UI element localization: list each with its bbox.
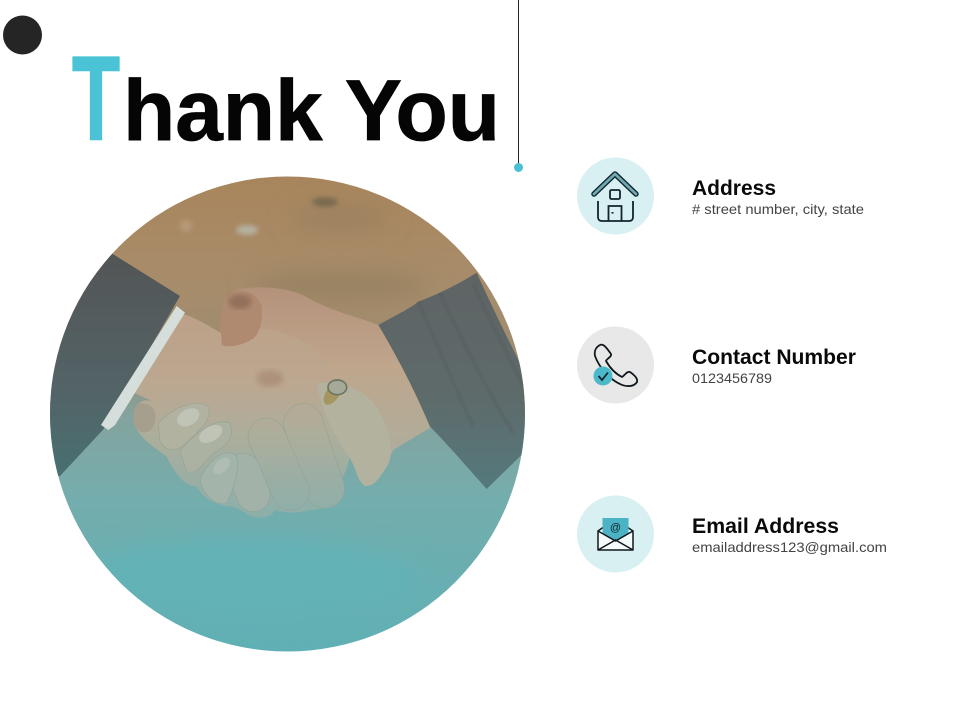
right sleeve: [378, 273, 530, 489]
ring: [324, 379, 348, 405]
text: Address: Address: [692, 177, 776, 200]
left hand fingertips with nails: [133, 403, 238, 504]
title: Thank You: T: [72, 32, 120, 166]
text: Contact Number: [692, 346, 856, 386]
handshake photo circle: [30, 170, 540, 660]
icon: house: [577, 158, 654, 234]
text: Address: [692, 177, 864, 217]
knuckle shading: [257, 370, 283, 387]
text: Email Address: [692, 515, 887, 555]
vertical accent line with dot: [514, 0, 523, 172]
shaded thumb: [221, 290, 262, 346]
text: Address: # street number, city, state: [692, 201, 864, 217]
rear finger with ring: [317, 383, 391, 486]
white shirt cuff: [101, 306, 185, 430]
sleeve folds: [417, 301, 524, 386]
decorative black dot: [3, 16, 42, 54]
text: Email Address: Email Address: [692, 515, 839, 538]
title: Thank You: hank You: [123, 63, 500, 159]
icon: email envelope: [577, 496, 654, 572]
front hand and palm: [133, 314, 350, 518]
text: Email Address: emailaddress123@gmail.com: [692, 539, 887, 555]
icon: email envelope: @: [610, 522, 621, 534]
front fingers: [243, 423, 325, 495]
icon: phone: [577, 326, 654, 404]
rear hand and wrist: [221, 287, 432, 486]
text: Contact Number: Contact Number: [692, 346, 856, 369]
text: Contact Number: 0123456789: [692, 370, 772, 386]
title: Thank You: [72, 32, 500, 166]
left sleeve: [50, 254, 180, 476]
hands drawn in zoomed (3x) coordinates: [30, 253, 530, 518]
